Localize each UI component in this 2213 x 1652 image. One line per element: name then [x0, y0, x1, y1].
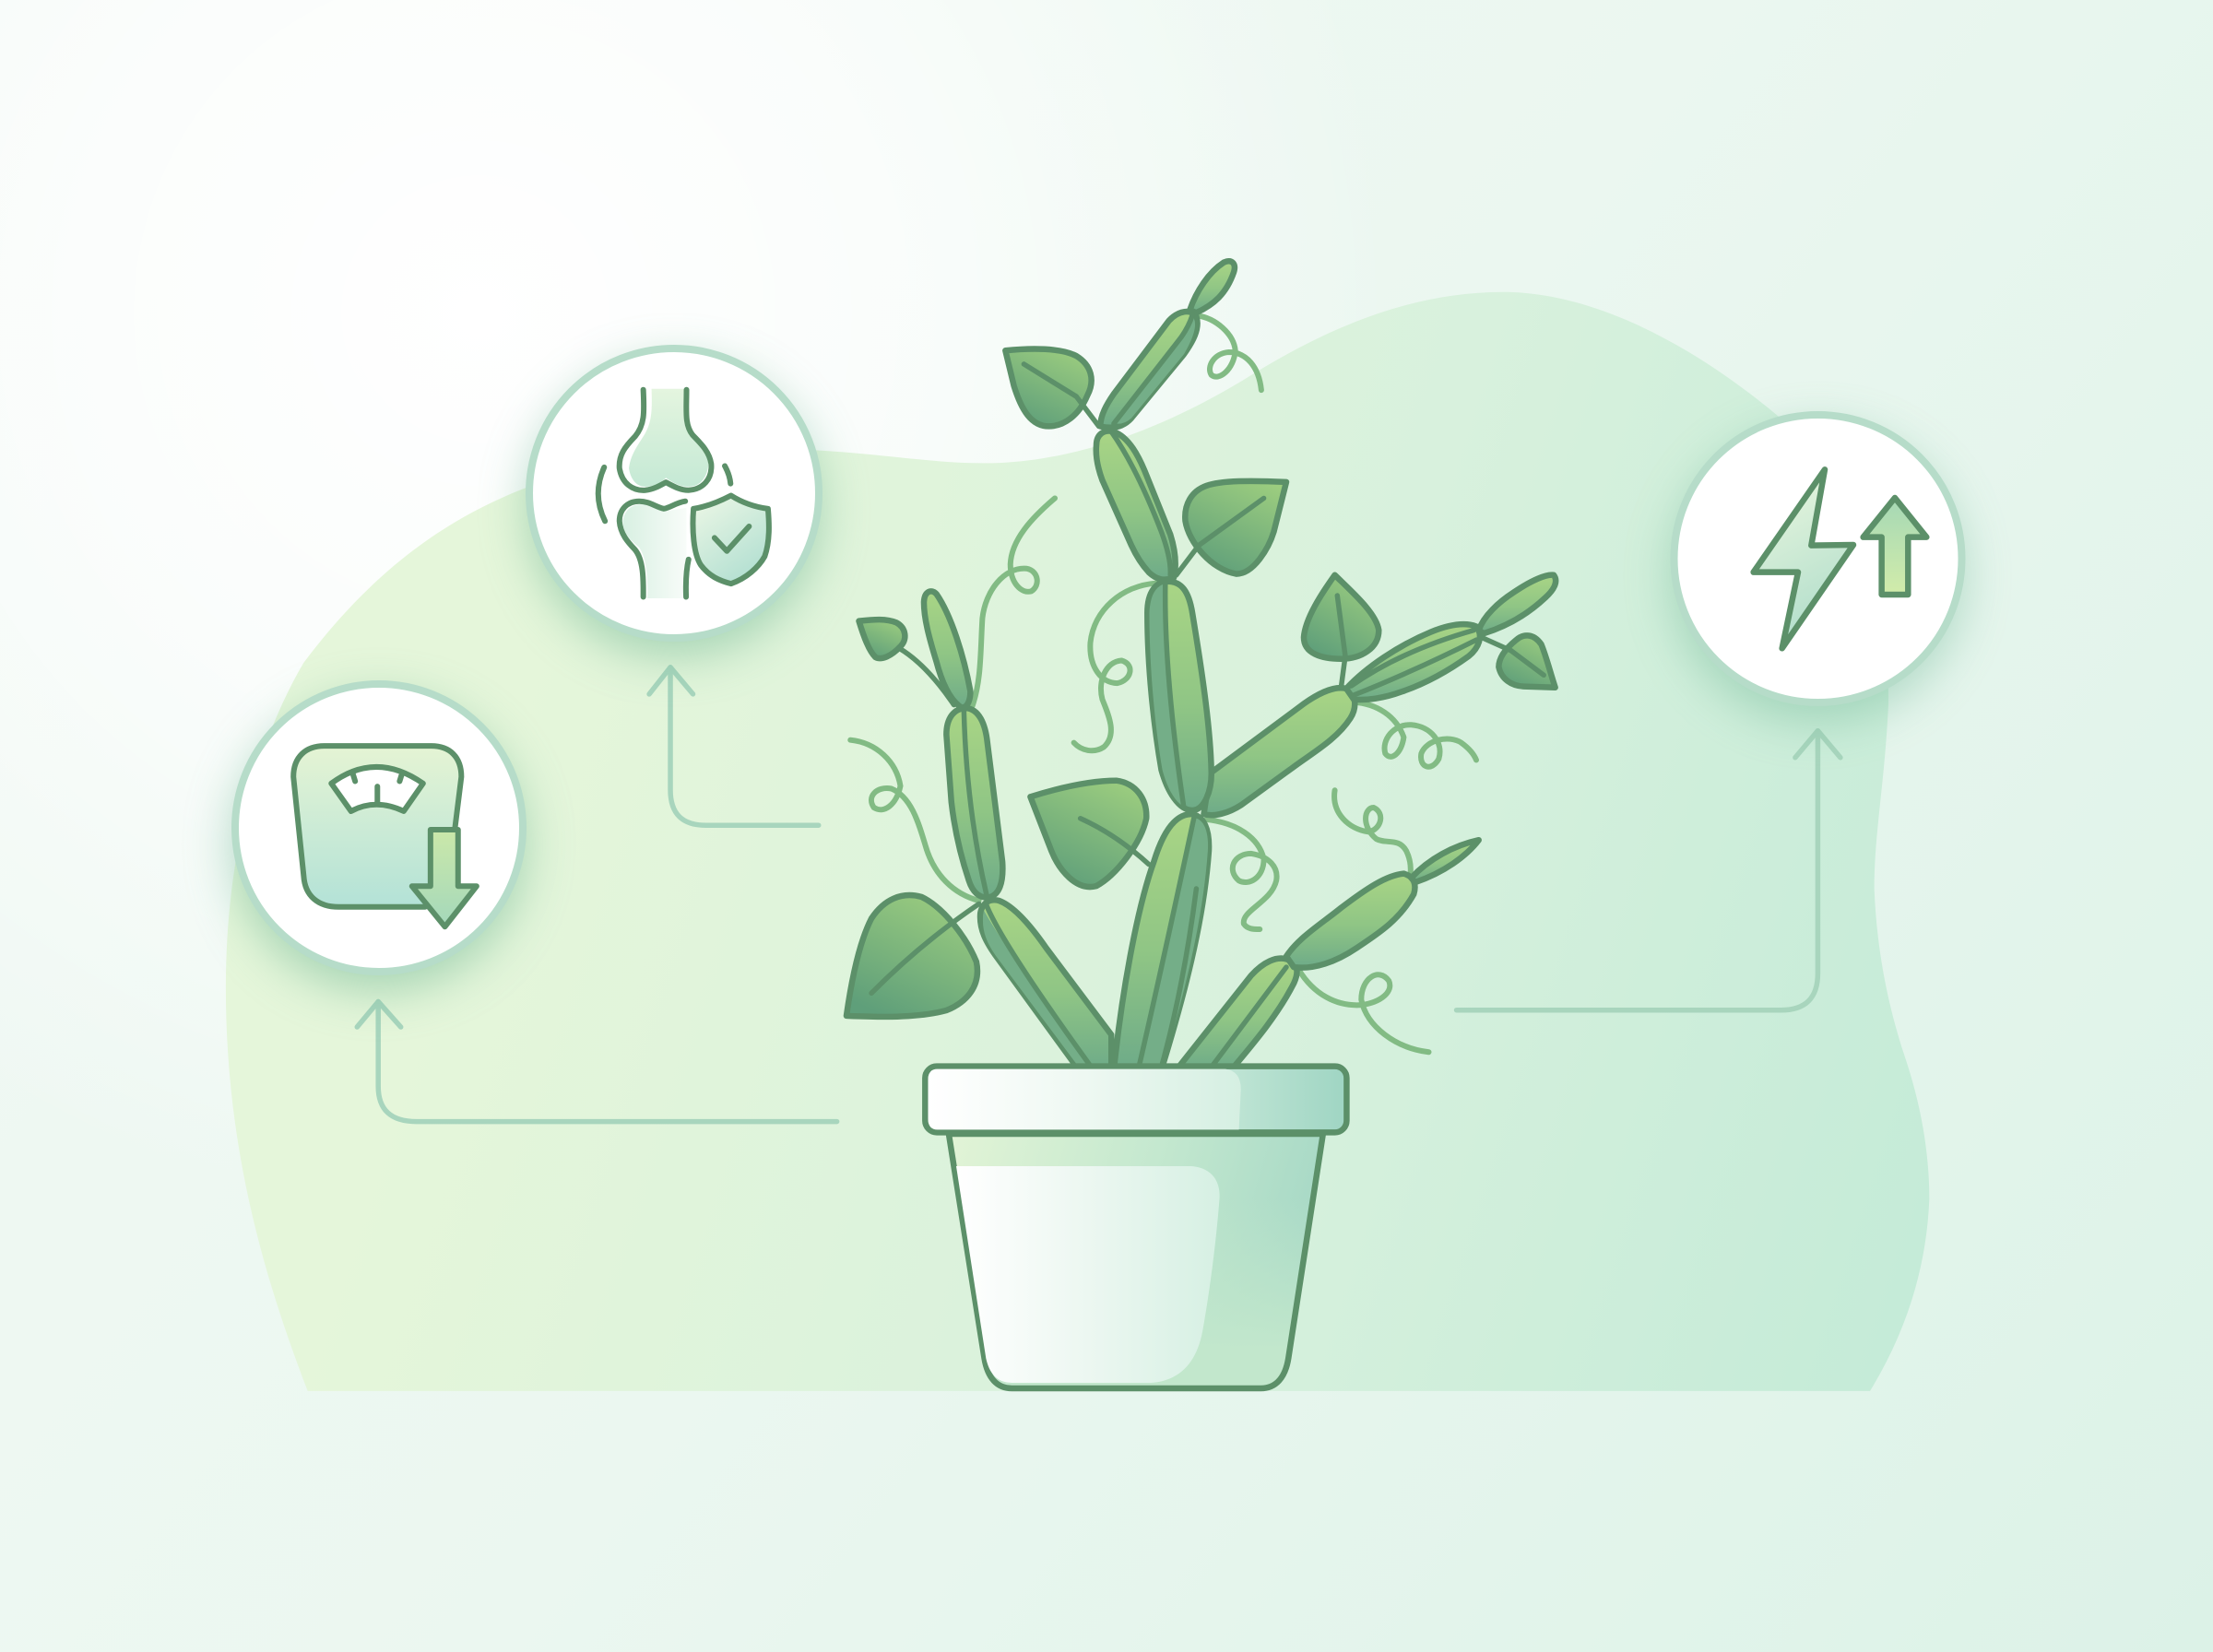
pot rim [925, 1067, 1346, 1132]
icon: knee joint with shield [598, 389, 769, 598]
flower pot [925, 1067, 1346, 1388]
icon circle: energy boost [1672, 415, 1963, 721]
arrow: plant to energy [1457, 731, 1840, 1010]
icon circle: joint protection [528, 348, 820, 655]
arrow: plant to weight scale [357, 1002, 837, 1122]
background blob [226, 292, 1929, 1391]
tendrils [850, 315, 1476, 1052]
arrow: plant to joint [649, 667, 819, 825]
rim highlight [928, 1069, 1241, 1129]
pot highlight [956, 1166, 1220, 1383]
pot body [949, 1134, 1323, 1388]
leaf stems and veins [846, 349, 1556, 1017]
icon: lightning bolt and up arrow [1754, 469, 1926, 648]
stem segments [924, 261, 1556, 1070]
plant [846, 261, 1556, 1070]
icon: bathroom scale with down arrow [293, 746, 477, 926]
icon circle: weight loss [233, 684, 525, 990]
